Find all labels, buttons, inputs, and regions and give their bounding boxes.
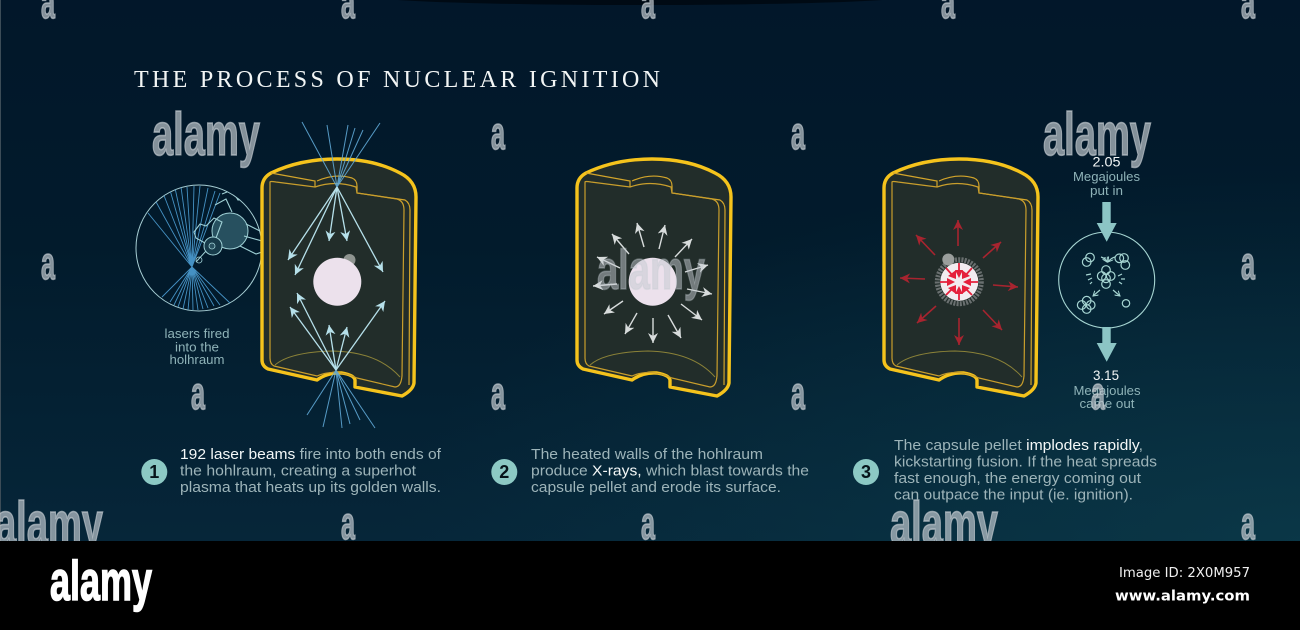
hohlraum 2 <box>577 159 731 396</box>
step 2 text: produce X-rays, which blast towards the <box>531 464 809 480</box>
step 2 text: capsule pellet and erode its surface. <box>531 480 781 496</box>
watermarks: alamy <box>152 101 260 168</box>
step 1 text: 192 laser beams fire into both ends of <box>180 447 442 463</box>
energy out label: came out <box>1080 397 1135 411</box>
step 3 text: The capsule pellet implodes rapidly , <box>894 438 1143 454</box>
energy out label: 3.15 <box>1093 367 1119 383</box>
arrows from laser entry points <box>288 187 385 370</box>
caption: lasers fired: holhraum <box>170 353 224 367</box>
fusion diagram <box>1059 232 1155 328</box>
watermarks: a <box>341 497 355 549</box>
watermarks: alamy <box>597 238 705 301</box>
hohlraum 1 <box>262 159 416 396</box>
image id: Image ID: 2X0M957 <box>1119 565 1250 581</box>
energy in label: Megajoules <box>1073 170 1140 184</box>
step 3 text <box>853 438 1157 504</box>
website: www.alamy.com <box>1115 588 1250 604</box>
pellet <box>313 254 361 306</box>
watermarks: a <box>191 367 205 419</box>
arrow: energy out <box>1097 327 1117 362</box>
outward red arrows <box>900 220 1018 345</box>
caption: lasers fired <box>164 327 230 367</box>
step 1 text: plasma that heats up its golden walls. <box>180 480 441 496</box>
step 1 text <box>141 447 442 496</box>
watermarks: alamy <box>890 490 998 557</box>
watermarks: a <box>491 367 505 419</box>
panel: step 3 implosion <box>884 159 1038 396</box>
inset: laser target chamber <box>136 185 262 311</box>
energy out label: Megajoules <box>1074 384 1140 398</box>
step 2 text <box>491 447 809 496</box>
watermarks: a <box>1241 497 1255 549</box>
watermarks: a <box>641 497 655 549</box>
badge 2 <box>491 459 517 485</box>
watermarks: alamy <box>1043 101 1151 168</box>
laser beams entering <box>302 122 380 428</box>
x-ray arrows <box>593 223 712 343</box>
watermarks: a <box>491 107 505 159</box>
step 3 text: fast enough, the energy coming out <box>894 471 1141 487</box>
badge 2: 2 <box>499 462 509 482</box>
title: THE PROCESS OF NUCLEAR IGNITION <box>134 67 660 93</box>
energy out label <box>1074 367 1140 411</box>
footer bar <box>0 541 1300 630</box>
imploding capsule <box>937 254 981 304</box>
caption: lasers fired: into the <box>175 340 219 354</box>
badge 3 <box>853 459 879 485</box>
step 2 text: The heated walls of the hohlraum <box>531 447 763 463</box>
step 1 text: the hohlraum, creating a superhot <box>180 464 416 480</box>
watermarks: alamy <box>0 490 103 557</box>
badge 1 <box>141 459 167 485</box>
energy in label: 2.05 <box>1092 154 1121 170</box>
step 3 text: can outpace the input (ie. ignition). <box>894 488 1133 504</box>
watermarks: a <box>1091 367 1105 419</box>
panel: energy in and out <box>1059 154 1155 411</box>
energy in label: put in <box>1090 184 1123 198</box>
step 3 text: kickstarting fusion. If the heat spreads <box>894 454 1157 470</box>
panel: step 1 lasers <box>136 122 416 428</box>
watermarks: a <box>791 367 805 419</box>
panel: step 2 x-rays <box>577 159 731 396</box>
footer logo: alamy <box>50 549 152 612</box>
watermarks: a <box>791 107 805 159</box>
pellet <box>629 258 677 306</box>
watermarks: a <box>1241 237 1255 289</box>
caption: lasers fired: lasers fired <box>164 327 230 341</box>
energy in label <box>1073 154 1140 198</box>
badge 3: 3 <box>861 462 871 482</box>
badge 1: 1 <box>149 462 159 482</box>
hohlraum 3 <box>884 159 1038 396</box>
watermarks: a <box>41 237 55 289</box>
arrow: energy in <box>1097 202 1117 242</box>
